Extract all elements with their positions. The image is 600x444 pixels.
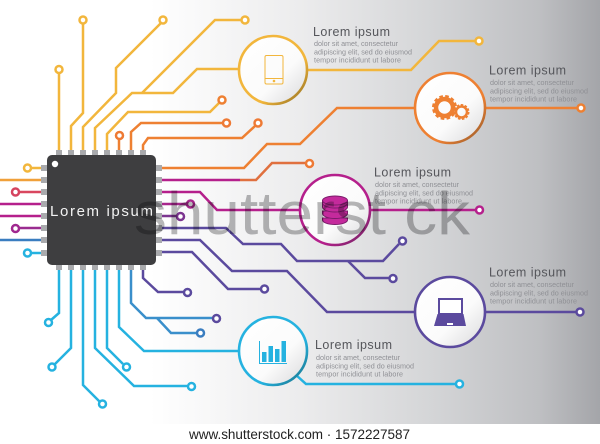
circle: database (300, 175, 370, 245)
watermark: shutterst ck (134, 180, 471, 247)
circle: laptop (415, 277, 485, 347)
text block: tablet (313, 25, 412, 64)
icon: gears (434, 96, 468, 119)
traces: right purple (160, 228, 416, 312)
footer credit: www.shutterstock.com · 1572227587 (188, 427, 410, 442)
text block: laptop: dolor sit amet, consectetur (490, 280, 575, 289)
icon: bar chart (259, 341, 287, 364)
text block: database: Lorem ipsum (374, 166, 451, 180)
text block: database (374, 166, 473, 206)
icon: laptop (434, 299, 466, 326)
traces: left side (0, 164, 43, 256)
text block: gears: adipiscing elit, sed do eiusmod (490, 86, 588, 96)
text block: tablet: tempor incididunt ut labore (314, 56, 401, 64)
circle: gears (415, 73, 485, 143)
text block: gears: dolor sit amet, consectetur (490, 78, 575, 87)
circle: tablet (239, 36, 307, 104)
text block: gears (489, 64, 588, 104)
text block: laptop (489, 266, 588, 306)
text block: tablet: dolor sit amet, consectetur (314, 39, 399, 48)
text block: database: adipiscing elit, sed do eiusmod (375, 188, 473, 198)
traces: right exits from circles (307, 38, 584, 316)
circle: bar chart (239, 317, 307, 385)
text block: database: dolor sit amet, consectetur (375, 180, 460, 189)
text block: gears: Lorem ipsum (489, 64, 566, 78)
microchip (41, 150, 162, 270)
text block: gears: tempor incididunt ut labore (490, 94, 577, 104)
text block: tablet: adipiscing elit, sed do eiusmod (314, 48, 412, 56)
text block: laptop: Lorem ipsum (489, 266, 566, 280)
text block: bar chart: adipiscing elit, sed do eiusmod (316, 362, 414, 370)
traces: right orange and magenta (160, 108, 483, 220)
text block: bar chart (315, 338, 414, 378)
text block: laptop: tempor incididunt ut labore (490, 296, 577, 306)
text block: bar chart: Lorem ipsum (315, 338, 392, 352)
microchip: Lorem ipsum (50, 203, 153, 220)
text block: database: tempor incididunt ut labore (375, 196, 462, 206)
icon: tablet (265, 56, 283, 84)
text block: tablet: Lorem ipsum (313, 25, 390, 39)
footer credit (0, 424, 600, 444)
traces: bottom blue (45, 270, 463, 408)
text block: bar chart: tempor incididunt ut labore (316, 370, 403, 378)
traces: top yellow and orange (56, 16, 262, 150)
text block: bar chart: dolor sit amet, consectetur (316, 353, 401, 362)
icon: database (322, 196, 348, 224)
text block: laptop: adipiscing elit, sed do eiusmod (490, 288, 588, 298)
